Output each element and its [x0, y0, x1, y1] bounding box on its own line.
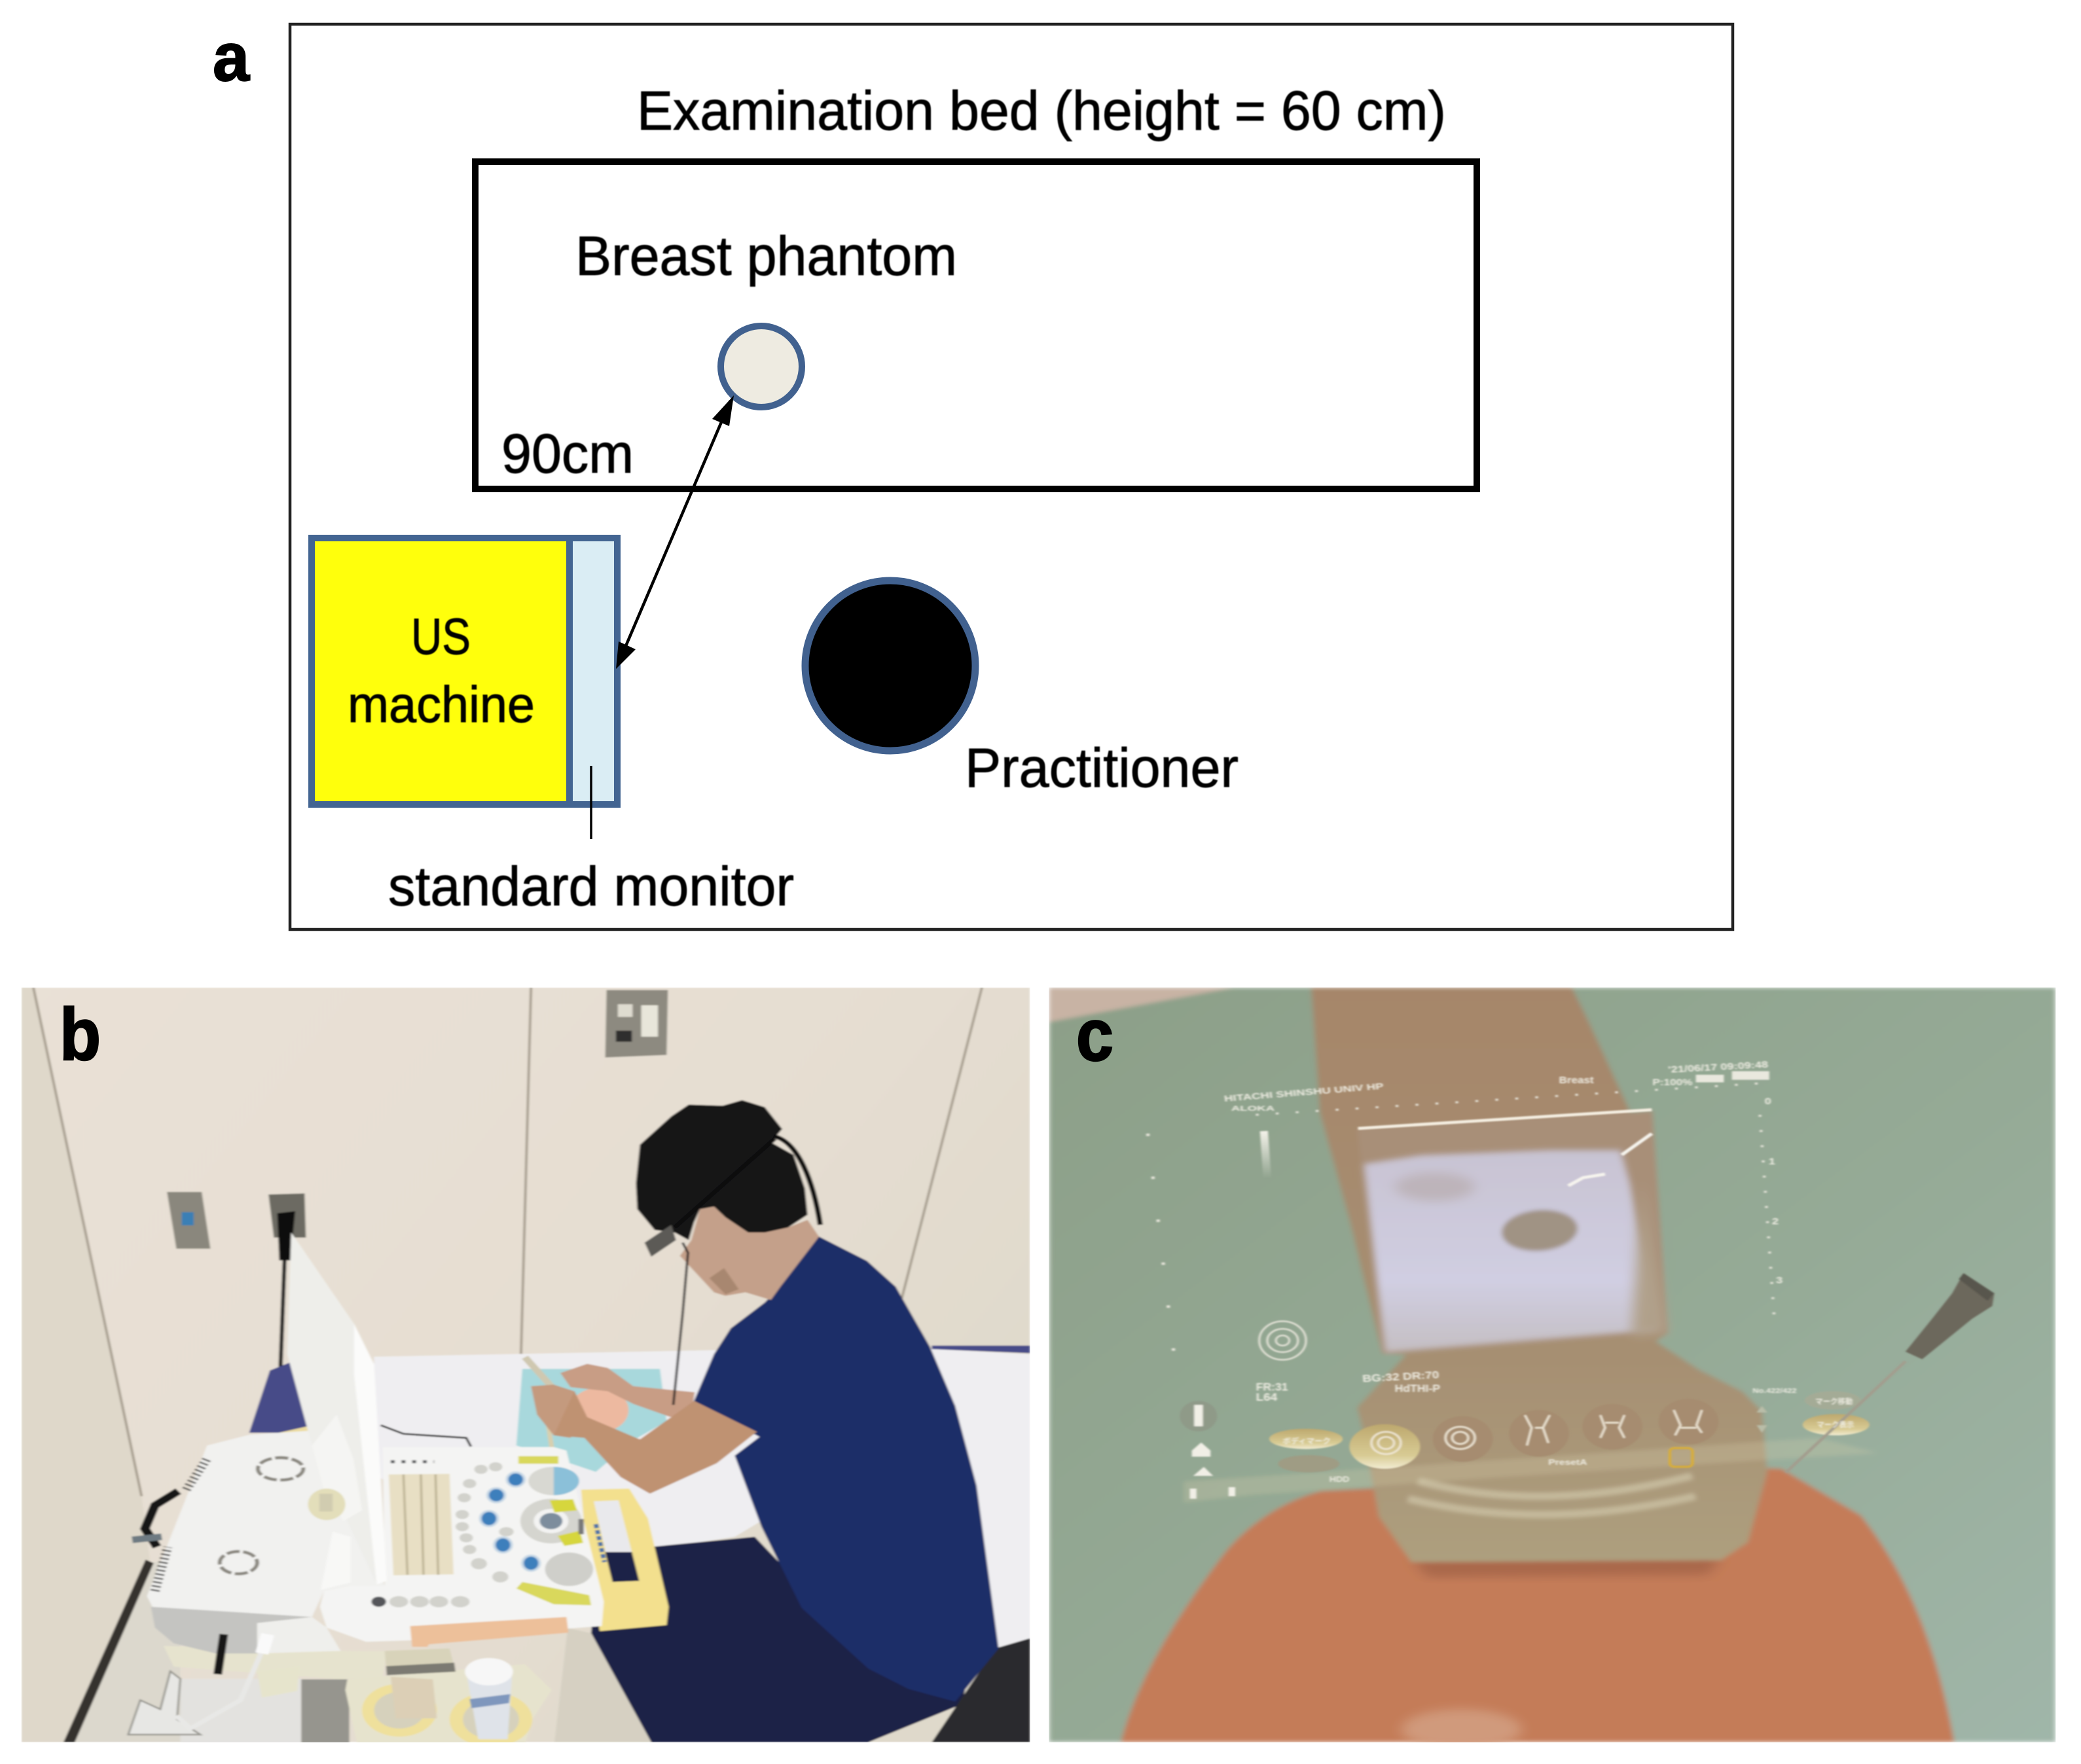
text: power: P:100% — [1652, 1077, 1693, 1088]
floor patch by cart — [554, 1628, 651, 1742]
depth scale numbers — [1765, 1096, 1782, 1286]
label: machine: machine — [348, 675, 535, 733]
cable bundle — [301, 1680, 350, 1745]
green sheet background — [1049, 988, 2055, 1742]
upper hand and forearm — [560, 1364, 695, 1417]
leader line to monitor — [590, 766, 592, 839]
text: frame rate: FR:31 — [1256, 1382, 1288, 1394]
label: practitioner: Practitioner — [965, 737, 1239, 799]
lower hand cradling probe — [531, 1384, 587, 1438]
text: mode: HdTHI-P — [1395, 1383, 1440, 1394]
medical tape — [410, 1617, 568, 1647]
text: gain: BG:32 DR:70 — [1362, 1369, 1439, 1384]
panel label c: c — [1076, 994, 1113, 1076]
machine rear frame and ports — [151, 1607, 340, 1729]
bottle — [465, 1658, 513, 1739]
body vents — [220, 1458, 303, 1574]
depth scale numbers: 1 — [1769, 1157, 1775, 1167]
top ticks — [1256, 1083, 1760, 1115]
ultrasound base — [1358, 1111, 1668, 1354]
panel label b: b — [60, 994, 101, 1075]
bed mattress — [374, 1349, 1030, 1648]
power outlet and plug — [268, 1193, 306, 1367]
depth scale numbers: 0 — [1765, 1096, 1771, 1106]
pink corner — [1049, 988, 1235, 1022]
wall — [22, 988, 1030, 1742]
bench — [932, 1638, 1030, 1742]
heading: examination bed: Examination bed (height = 60 cm) — [637, 80, 1446, 141]
cart lower body and frame — [164, 1646, 387, 1680]
black cable left — [132, 1491, 178, 1547]
body mark icon — [1259, 1322, 1306, 1359]
neck and face — [680, 1206, 819, 1300]
text: mark move: マーク移動 — [1815, 1397, 1853, 1405]
wall panel seams — [33, 988, 982, 1496]
phantom — [576, 1388, 630, 1430]
left ticks — [1148, 1134, 1176, 1369]
text: HDD: HDD — [1330, 1475, 1350, 1484]
bed blue edge left — [249, 1359, 312, 1433]
yellow pad behind machine — [279, 1423, 327, 1435]
depth ticks — [1760, 1115, 1775, 1323]
needle — [1786, 1273, 1994, 1472]
label: standard monitor: standard monitor — [388, 855, 794, 917]
text: vendor: ALOKA — [1231, 1105, 1275, 1113]
holster — [128, 1671, 200, 1735]
bed blue edge right — [932, 1346, 1030, 1353]
double arrow: 90 cm distance — [618, 401, 731, 664]
text: preset A: PresetA — [1548, 1458, 1587, 1467]
cup ring one — [362, 1684, 437, 1737]
text: preset: Breast — [1559, 1074, 1594, 1086]
arrow head near monitor — [616, 641, 636, 669]
US machine — [312, 538, 570, 804]
holstered probe — [385, 1648, 456, 1718]
label: 90cm: 90cm — [501, 423, 634, 484]
ultrasound shadow blotch — [1395, 1173, 1475, 1201]
probe and cable — [525, 1358, 554, 1448]
console knobs and buttons — [371, 1456, 604, 1608]
panel label a: a — [213, 20, 250, 96]
arm — [554, 1391, 757, 1494]
depth scale numbers: 2 — [1772, 1217, 1779, 1227]
probe and cup base — [346, 1664, 552, 1745]
hair — [636, 1100, 808, 1240]
white status boxes — [1696, 1071, 1769, 1083]
panel b: photo of practitioner at ultrasound machine — [22, 988, 1030, 1747]
wall switch plate — [605, 990, 668, 1058]
standard monitor block — [570, 538, 617, 804]
phantom highlight — [1402, 1709, 1521, 1750]
left wall plate — [167, 1192, 210, 1249]
touch panel icon buttons — [1180, 1391, 1870, 1499]
head-mounted display strap and visor — [645, 1136, 820, 1405]
breast phantom — [1121, 1468, 1954, 1742]
console surface — [320, 1447, 604, 1642]
side vents — [155, 1459, 207, 1591]
touch panel strip — [1184, 1438, 1878, 1502]
monitor — [287, 1233, 387, 1585]
panel a: room layout diagram — [213, 20, 1733, 929]
probe shadow — [1411, 1557, 1721, 1577]
room outline — [290, 24, 1733, 929]
teal sheet — [516, 1369, 666, 1472]
handle opening dark lower part — [605, 1552, 640, 1582]
text: date and time: '21/06/17 09:09:48 — [1668, 1060, 1769, 1075]
HMD overlay text — [1223, 1060, 1854, 1484]
monitor hinge — [308, 1488, 346, 1520]
probe — [1311, 988, 1767, 1562]
text: system name: HITACHI SHINSHU UNIV HP — [1223, 1082, 1384, 1104]
lesion — [1498, 1206, 1581, 1255]
panel c: view through head-mounted display — [1049, 988, 2055, 1750]
text: image counter: No.422/422 — [1752, 1387, 1797, 1394]
scrubs torso — [694, 1236, 998, 1702]
cabinet — [181, 1679, 301, 1745]
needle echo — [1568, 1134, 1652, 1186]
text: body mark button: ボディマーク — [1282, 1436, 1331, 1445]
keyboard — [389, 1474, 454, 1575]
cup ring two — [450, 1692, 532, 1747]
keyboard key columns — [403, 1475, 438, 1575]
ultrasound top line — [1358, 1109, 1652, 1128]
machine body — [147, 1430, 385, 1617]
text: line density: L64 — [1256, 1392, 1278, 1403]
text: mark display: マーク表示 — [1817, 1420, 1854, 1429]
floor strip — [67, 1562, 181, 1742]
bed cable — [381, 1425, 471, 1447]
breast phantom circle — [721, 326, 802, 407]
ultrasound lower right tint — [1632, 1181, 1668, 1337]
label: breast phantom: Breast phantom — [575, 225, 957, 287]
gain bar — [1264, 1131, 1267, 1178]
hinge arm — [321, 1532, 351, 1590]
practitioner circle — [805, 581, 975, 751]
examination bed outline — [475, 162, 1477, 489]
beard shading — [710, 1268, 739, 1294]
dark floor strip — [63, 1560, 154, 1742]
arrow head near phantom — [712, 395, 734, 426]
paper sheet — [312, 1414, 362, 1521]
practitioner trousers — [591, 1537, 969, 1742]
ultrasound bright speckle region — [1364, 1150, 1655, 1352]
left wall section — [22, 988, 151, 1742]
monitor right edge — [354, 1323, 387, 1585]
probe ridges — [1408, 1476, 1695, 1515]
label: US: US — [411, 607, 471, 665]
yellow handle — [581, 1488, 668, 1631]
depth scale numbers: 3 — [1776, 1275, 1782, 1286]
handle opening — [594, 1500, 640, 1582]
